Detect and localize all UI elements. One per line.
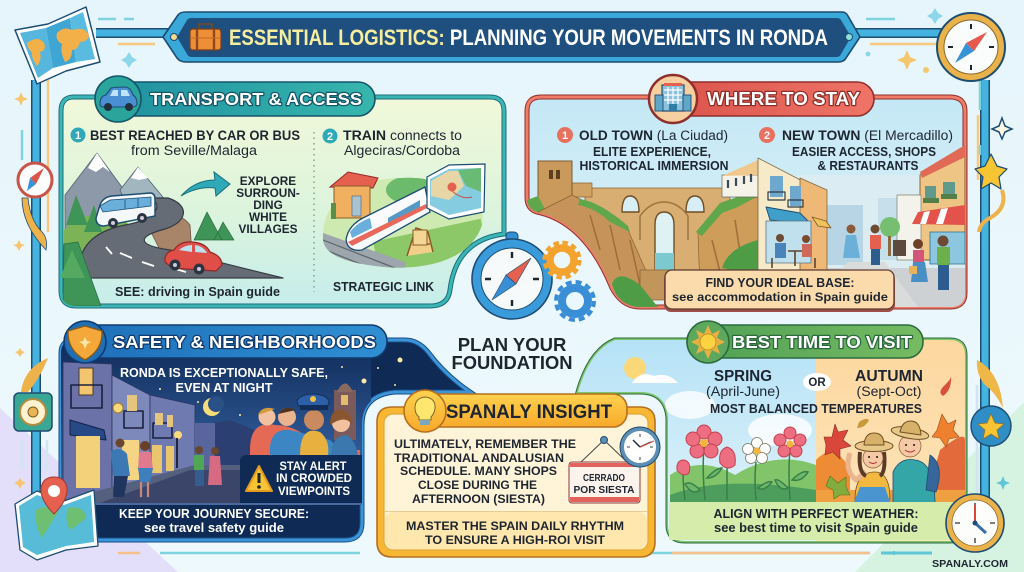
heading pill: Spanaly insight (404, 390, 627, 432)
link: travel safety guide: see travel safety guide (144, 521, 284, 535)
step 2: train: 2 (327, 131, 333, 143)
background mint corner (855, 402, 1024, 572)
badge: or (803, 373, 831, 391)
step 1: old town: HISTORICAL IMMERSION (580, 159, 728, 173)
icon: hanging siesta sign (569, 436, 640, 503)
text: master the daily rhythm: MASTER THE SPAIN DAILY RHYTHM (406, 519, 624, 533)
callout: stay alert: VIEWPOINTS (278, 486, 350, 498)
icon: small compass on route (18, 163, 52, 250)
heading pill: Spanaly insight: SPANALY INSIGHT (446, 402, 612, 423)
panel: Spanaly insight (377, 390, 660, 557)
season: spring: (April-June) (706, 384, 780, 399)
icon: red car (165, 242, 222, 274)
band: align with perfect weather (669, 502, 964, 540)
text: explore white villages (236, 174, 300, 236)
step 2: train: Algeciras/Cordoba (344, 143, 461, 158)
icon: orange gear (544, 242, 580, 278)
callout: stay alert: STAY ALERT (280, 461, 346, 473)
illustration: mountain road with bus and car (60, 153, 283, 306)
icon: folded world map (15, 7, 100, 84)
link: best time guide (714, 507, 918, 535)
callout: find your ideal base: see accommodation in Spain guide (672, 290, 888, 304)
illustration: night street (61, 340, 402, 505)
step 2: new town: NEW TOWN (El Mercadillo) (782, 128, 953, 143)
heading pill: transport and access (95, 76, 375, 122)
illustration: train and station (322, 163, 486, 268)
text: siesta reminder: ULTIMATELY, REMEMBER THE (394, 437, 576, 451)
step 1: old town (557, 127, 728, 173)
step 1: car or bus: 1 (75, 130, 81, 142)
text: Ronda is safe (120, 366, 328, 395)
step 2: new town: & RESTAURANTS (818, 159, 918, 173)
text: master the daily rhythm (406, 519, 624, 547)
icon: gold star (975, 154, 1007, 232)
callout: find your ideal base (664, 270, 895, 312)
divider: dotted (313, 132, 315, 292)
text: most balanced temperatures: MOST BALANCED TEMPERATURES (710, 402, 922, 416)
icon: wall clock (620, 427, 660, 467)
text: siesta reminder: AFTERNOON (SIESTA) (412, 492, 545, 506)
step 2: new town (759, 127, 953, 173)
icon: central compass (472, 232, 552, 319)
panel: where to stay (527, 75, 965, 312)
text: explore white villages: DING (253, 198, 283, 212)
season: autumn (855, 368, 923, 399)
arrow: to white villages (181, 172, 230, 196)
icon: top right compass (937, 13, 1005, 81)
heading pill: where to stay (649, 75, 874, 123)
heading pill: best time to visit: BEST TIME TO VISIT (732, 332, 912, 352)
text: explore white villages: EXPLORE (240, 174, 296, 188)
callout: stay alert (246, 461, 352, 498)
callout: find your ideal base: FIND YOUR IDEAL BASE: (706, 276, 854, 290)
background lavender corner (0, 408, 178, 572)
step 1: old town: OLD TOWN (La Ciudad) (579, 128, 728, 143)
illustration: spring and autumn scene (570, 338, 966, 543)
text: explore white villages: WHITE (249, 210, 287, 224)
icon: star badge (971, 360, 1011, 446)
text: siesta reminder: SCHEDULE. MANY SHOPS (400, 464, 557, 478)
icon: autumn couple (848, 421, 939, 505)
step 1: old town: 1 (562, 130, 568, 142)
season: spring: SPRING (714, 368, 772, 385)
season: spring (706, 368, 780, 399)
step 1: car or bus: from Seville/Malaga (131, 143, 258, 158)
step 2: train: TRAIN connects to (343, 128, 462, 143)
season: autumn: (Sept-Oct) (856, 384, 922, 399)
text: plan your foundation: FOUNDATION (452, 352, 572, 373)
icon: bottom right clock (946, 494, 1004, 552)
heading pill: best time to visit (687, 321, 923, 363)
text: explore white villages: VILLAGES (238, 222, 298, 236)
step 1: car or bus: BEST REACHED BY CAR OR BUS (90, 128, 300, 143)
step 1: car or bus (70, 128, 300, 158)
caption: strategic link: STRATEGIC LINK (333, 280, 434, 294)
brand: spanaly.com: SPANALY.COM (932, 559, 1008, 570)
heading pill: transport and access: TRANSPORT & ACCESS (150, 89, 362, 109)
text: plan your foundation (452, 334, 572, 373)
icon: spring flowers (677, 425, 808, 500)
heading pill: where to stay: WHERE TO STAY (707, 89, 860, 109)
step 2: new town: EASIER ACCESS, SHOPS (792, 145, 936, 159)
icon: bus (96, 193, 155, 228)
link: driving guide: SEE: driving in Spain guide (115, 284, 280, 299)
icon: hanging siesta sign: CERRADO (583, 472, 625, 484)
callout: stay alert: IN CROWDED (276, 473, 352, 485)
link: best time guide: ALIGN WITH PERFECT WEATHER: (714, 507, 918, 521)
icon: outline sparkle (992, 118, 1012, 139)
icon: blue gear (556, 282, 594, 320)
text: master the daily rhythm: TO ENSURE A HIGH-ROI VISIT (425, 533, 606, 547)
panel: transport and access (60, 76, 504, 306)
text: siesta reminder: CLOSE DURING THE (418, 478, 537, 492)
badge: or: OR (808, 377, 826, 389)
step 1: old town: ELITE EXPERIENCE, (593, 145, 711, 159)
title text: ESSENTIAL LOGISTICS: PLANNING YOUR MOVEMENTS IN RONDA (229, 25, 828, 50)
text: siesta reminder (394, 437, 576, 506)
panel: safety and neighborhoods (61, 321, 470, 540)
link: travel safety guide: KEEP YOUR JOURNEY SECURE: (119, 507, 309, 521)
heading pill: safety and neighborhoods (64, 321, 387, 363)
link: best time guide: see best time to visit Spain guide (714, 521, 918, 535)
text: siesta reminder: TRADITIONAL ANDALUSIAN (394, 451, 564, 465)
text: explore white villages: SURROUN- (236, 186, 300, 200)
text: plan your foundation: PLAN YOUR (458, 334, 566, 355)
icon: autumn leaves (824, 375, 959, 499)
panel: best time to visit (570, 321, 966, 543)
icon: suitcase (190, 24, 221, 50)
step 2: train (322, 128, 462, 158)
icon: map with location pin (15, 477, 98, 560)
text: Ronda is safe: RONDA IS EXCEPTIONALLY SAFE, (120, 366, 328, 380)
title banner (163, 12, 860, 62)
season: autumn: AUTUMN (855, 368, 923, 385)
icon: hanging siesta sign: POR SIESTA (574, 484, 635, 496)
illustration: Puente Nuevo old town (527, 160, 758, 312)
text: Ronda is safe: EVEN AT NIGHT (176, 381, 273, 395)
illustration: Mercadillo new town street (758, 145, 965, 310)
icon: green location badge (14, 358, 52, 431)
heading pill: safety and neighborhoods: SAFETY & NEIGHBORHOODS (113, 332, 376, 352)
link: travel safety guide (119, 507, 309, 535)
step 2: new town: 2 (764, 130, 770, 142)
